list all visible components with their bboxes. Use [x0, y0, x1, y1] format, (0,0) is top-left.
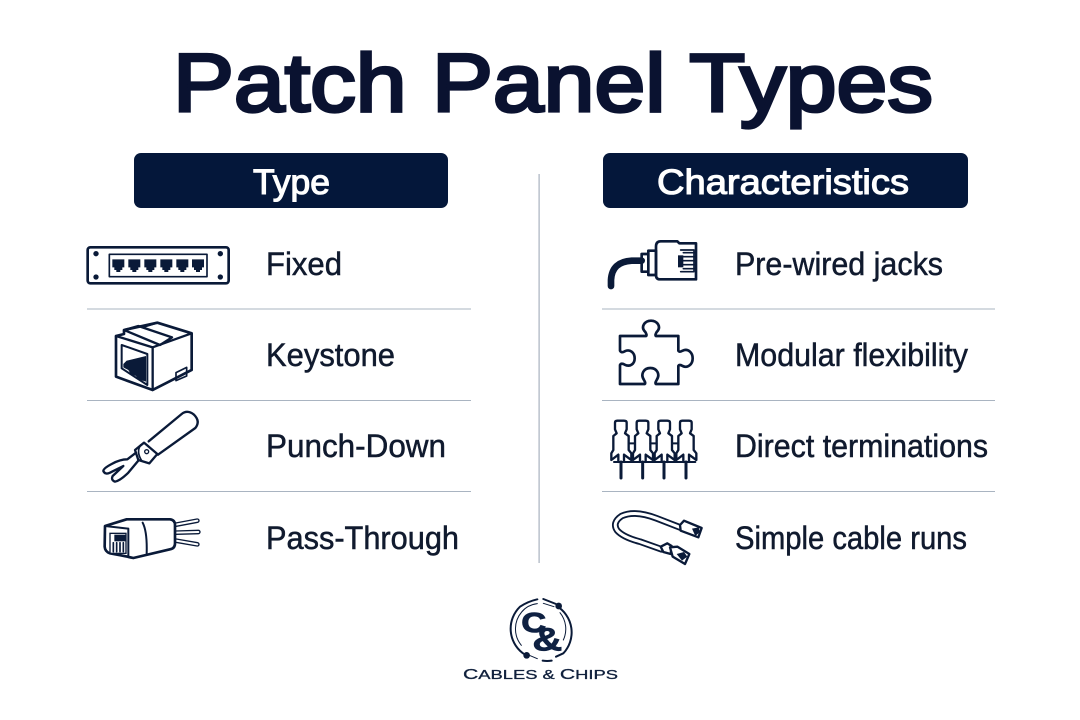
label: Direct terminations: Direct terminations — [735, 428, 988, 464]
logo emblem: C — [521, 607, 546, 638]
label: Pass-Through: Pass-Through — [266, 520, 459, 556]
logo emblem — [511, 599, 572, 661]
panel: characteristics column — [602, 153, 995, 564]
label: Modular flexibility: Modular flexibility — [735, 337, 968, 373]
icon: direct terminations — [611, 421, 696, 478]
icon: fixed patch panel — [88, 247, 229, 283]
icon: punch-down tool — [103, 412, 198, 482]
icon: pass-through coupler — [105, 519, 198, 558]
heading: Type — [134, 153, 448, 208]
logo wordmark: C ABLES & C HIPS — [463, 666, 618, 683]
label: Pre-wired jacks: Pre-wired jacks — [735, 246, 943, 282]
icon: pre-wired jack — [611, 241, 696, 286]
label: Fixed: Fixed — [266, 246, 342, 282]
center divider — [538, 174, 540, 563]
title: Patch Panel Types — [173, 38, 933, 129]
logo: Cables & Chips — [463, 599, 618, 683]
icon: puzzle piece — [620, 321, 693, 384]
heading: Characteristics: Characteristics — [657, 163, 909, 202]
icon: cable with RJ45 plugs — [615, 513, 702, 564]
label: Keystone: Keystone — [266, 337, 395, 373]
label: Punch-Down: Punch-Down — [266, 428, 446, 464]
label: Simple cable runs: Simple cable runs — [735, 520, 967, 556]
panel: type column — [87, 153, 471, 558]
icon: keystone jack — [116, 323, 192, 390]
logo emblem: & — [532, 622, 562, 658]
heading: Type: Type — [253, 163, 330, 202]
heading: Characteristics — [603, 153, 968, 208]
